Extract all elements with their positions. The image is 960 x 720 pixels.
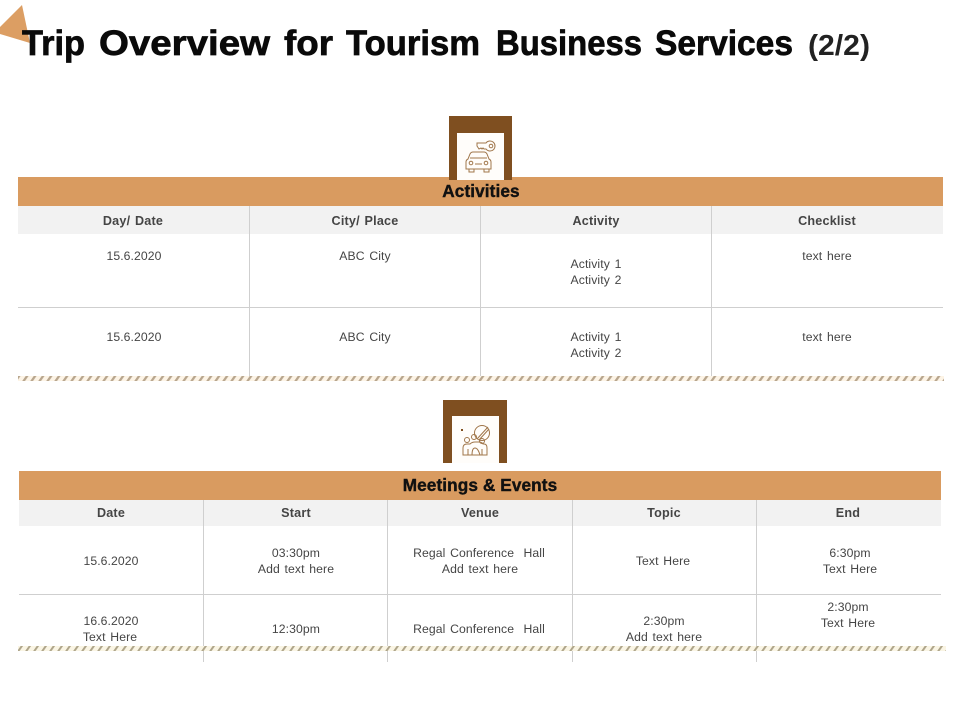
activities column headers: Checklist xyxy=(798,214,857,228)
activities row 2: Activity 1 xyxy=(571,330,622,344)
meetings row 1 xyxy=(83,546,877,576)
meetings column headers: Start xyxy=(281,506,311,520)
meetings row 2: Add text here xyxy=(626,630,702,644)
meetings row 2: Text Here xyxy=(821,616,875,630)
meetings row 2: 16.6.2020 xyxy=(83,614,139,628)
activities row 2 xyxy=(106,330,852,360)
meetings row 1: 15.6.2020 xyxy=(83,554,139,568)
activities column headers xyxy=(18,206,943,234)
meetings column headers: Date xyxy=(97,506,125,520)
title: Overview xyxy=(99,24,271,63)
activities row 1: Activity 2 xyxy=(571,273,622,287)
meetings row 1: Text Here xyxy=(636,554,690,568)
meetings row 2: 12:30pm xyxy=(272,622,320,636)
meetings header bar: Meetings & Events xyxy=(403,475,557,495)
meetings column headers xyxy=(19,500,941,526)
activities header bar: Activities xyxy=(442,181,520,201)
activities row 2: 15.6.2020 xyxy=(106,330,162,344)
meetings row 1: Add text here xyxy=(442,562,518,576)
activities column headers: City/ Place xyxy=(332,214,398,228)
meetings row 2 xyxy=(83,600,875,644)
title xyxy=(22,24,870,63)
activities row 2: text here xyxy=(802,330,852,344)
activities row 2: Activity 2 xyxy=(571,346,622,360)
meetings row 1: 03:30pm xyxy=(272,546,320,560)
panel: meetings and events table xyxy=(18,400,946,662)
meetings column headers: Topic xyxy=(647,506,681,520)
title: Business xyxy=(496,24,642,63)
title: for xyxy=(284,24,333,63)
meetings header bar xyxy=(19,471,941,500)
meetings row 2: 2:30pm xyxy=(643,614,685,628)
activities row 1: Activity 1 xyxy=(571,257,622,271)
meetings row 2: Text Here xyxy=(83,630,137,644)
meetings row 1: 6:30pm xyxy=(829,546,871,560)
panel: activities table xyxy=(18,116,944,381)
activities row 1 xyxy=(106,249,852,287)
activities column headers: Day/ Date xyxy=(103,214,163,228)
meetings column headers: End xyxy=(836,506,860,520)
activities row 1: ABC City xyxy=(339,249,392,263)
activities row 2: ABC City xyxy=(339,330,392,344)
meetings column headers: Venue xyxy=(461,506,499,520)
activities header bar xyxy=(18,177,943,206)
meetings row 2: 2:30pm xyxy=(827,600,869,614)
icon: people with prohibition sign xyxy=(443,400,507,463)
meetings row 2: Regal Conference Hall xyxy=(413,622,545,636)
corner triangle accent xyxy=(0,5,30,43)
title: (2/2) xyxy=(808,30,870,62)
activities column headers: Activity xyxy=(572,214,620,228)
activities row 1: 15.6.2020 xyxy=(106,249,162,263)
meetings row 1: Regal Conference Hall xyxy=(413,546,545,560)
meetings row 1: Text Here xyxy=(823,562,877,576)
activities row 1: text here xyxy=(802,249,852,263)
icon: car and key xyxy=(449,116,512,180)
title: Services xyxy=(655,24,793,63)
meetings row 1: Add text here xyxy=(258,562,334,576)
title: Trip xyxy=(22,24,85,63)
title: Tourism xyxy=(346,24,480,63)
